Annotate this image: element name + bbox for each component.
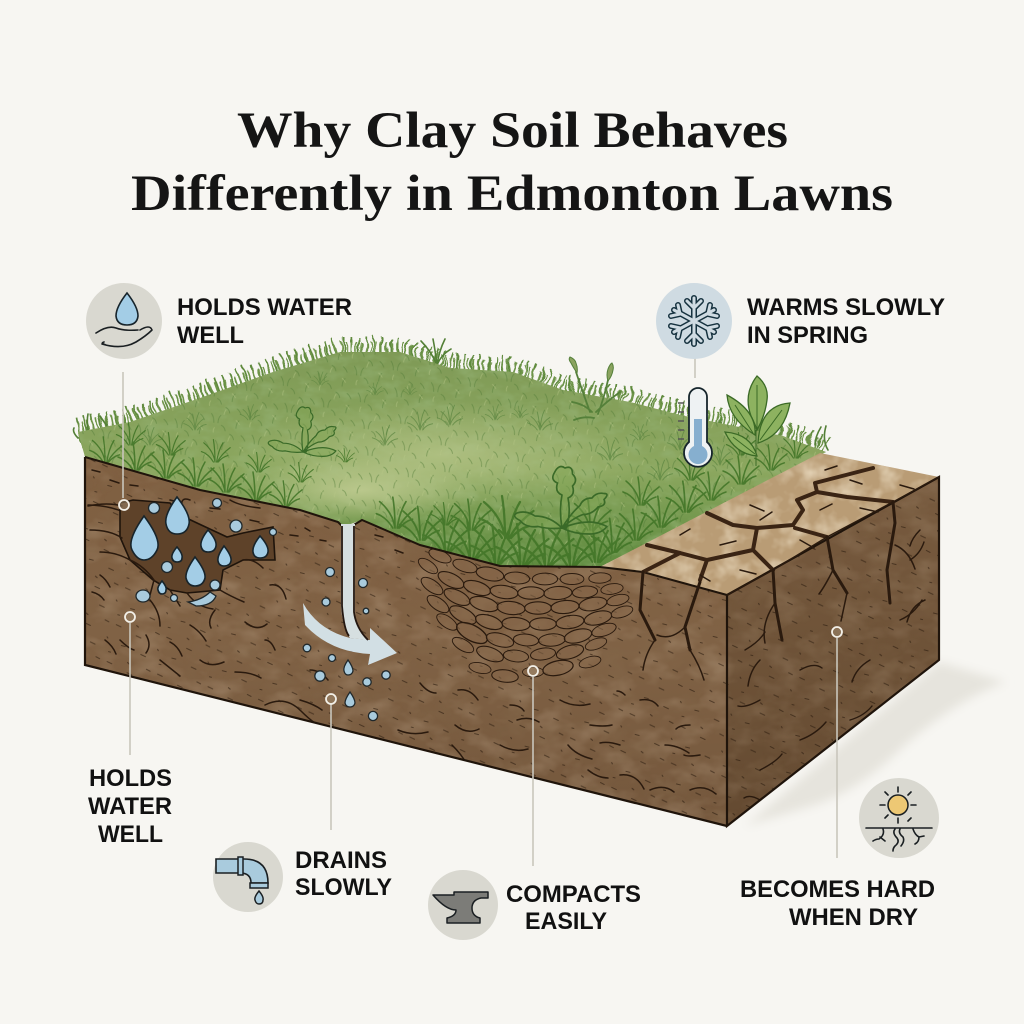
callout: warms slowly in spring: WARMS SLOWLY bbox=[747, 294, 945, 321]
callout: compacts easily: COMPACTS bbox=[506, 881, 641, 908]
soil right face bbox=[727, 470, 942, 830]
callout: holds water well (top): HOLDS WATER bbox=[177, 294, 352, 321]
callout: holds water well (left): WELL bbox=[98, 821, 163, 848]
callout: becomes hard when dry: WHEN DRY bbox=[789, 904, 918, 931]
grass top surface bbox=[70, 330, 840, 575]
tall seed-head weed bbox=[569, 357, 620, 420]
callout: warms slowly in spring: IN SPRING bbox=[747, 322, 868, 349]
soil squiggle cracks bbox=[88, 470, 716, 794]
icon: dripping pipe bbox=[213, 842, 283, 912]
callout: holds water well (top): WELL bbox=[177, 322, 244, 349]
water pocket with droplets bbox=[88, 497, 276, 626]
callout: compacts easily: EASILY bbox=[525, 908, 607, 935]
cracked dry crust bbox=[600, 450, 940, 600]
callout: becomes hard when dry: BECOMES HARD bbox=[740, 876, 935, 903]
drainage arrow and droplets bbox=[303, 524, 397, 721]
title: Differently in Edmonton Lawns bbox=[131, 166, 893, 222]
callout: becomes hard when dry bbox=[740, 778, 939, 931]
icon: water drop over hand bbox=[86, 283, 162, 359]
callout: holds water well (left): HOLDS bbox=[89, 765, 172, 792]
callout: holds water well (left): WATER bbox=[88, 793, 172, 820]
icon: anvil bbox=[428, 870, 498, 940]
title: Why Clay Soil Behaves bbox=[237, 103, 788, 159]
callout: compacts easily bbox=[428, 870, 641, 940]
crust and face cracks bbox=[640, 466, 939, 686]
callout: holds water well (left) bbox=[88, 765, 172, 848]
callout: holds water well (top) bbox=[86, 283, 352, 359]
callout: drains slowly: SLOWLY bbox=[295, 874, 392, 901]
callout connectors bbox=[119, 358, 842, 866]
soil front face bbox=[85, 450, 730, 830]
thermometer bbox=[678, 388, 712, 467]
compacted cobble layer bbox=[416, 546, 634, 684]
young plant bbox=[725, 376, 790, 466]
title bbox=[131, 103, 893, 222]
icon: sun over cracked ground bbox=[859, 778, 939, 858]
callout: drains slowly bbox=[213, 842, 392, 912]
callout: drains slowly: DRAINS bbox=[295, 847, 387, 874]
callout: warms slowly in spring bbox=[656, 283, 945, 359]
icon: snowflake bbox=[656, 283, 732, 359]
soil block illustration bbox=[70, 330, 942, 830]
weed leaves bbox=[268, 407, 607, 534]
ground shadow bbox=[745, 662, 1006, 826]
